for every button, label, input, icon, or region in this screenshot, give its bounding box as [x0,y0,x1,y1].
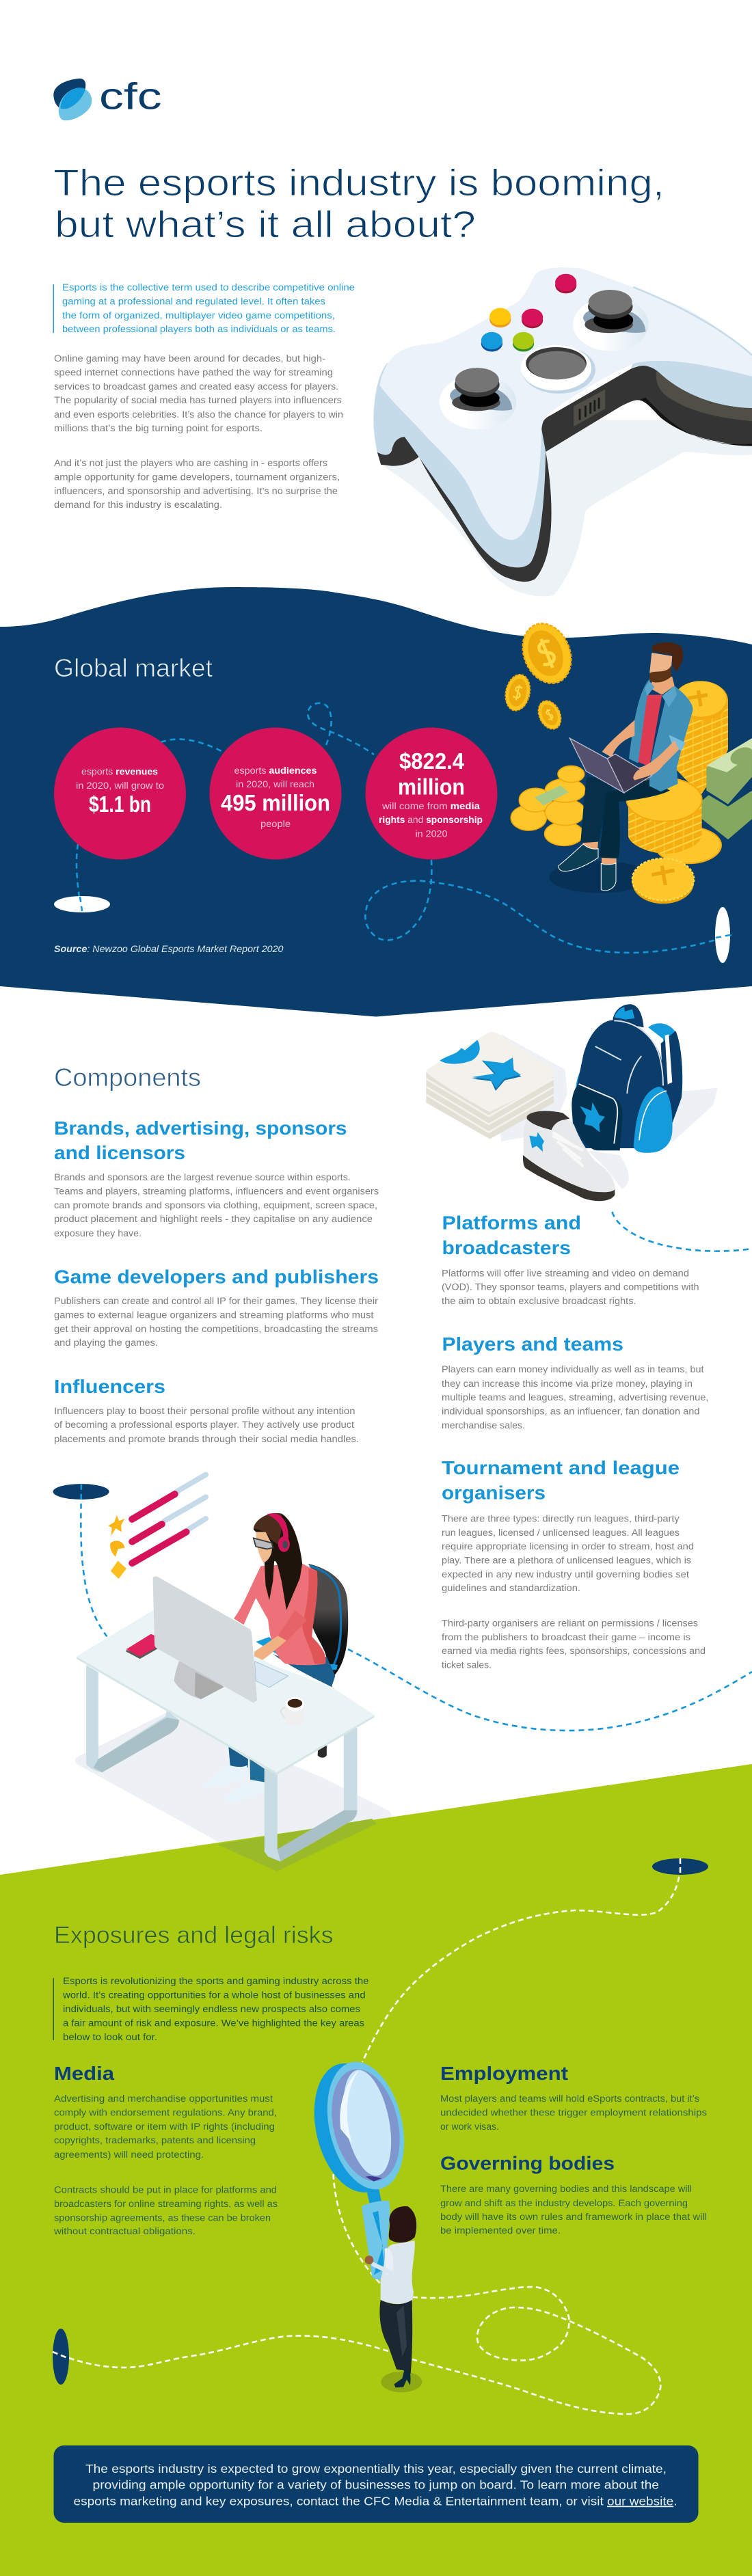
text block: tournament: expected in any new industry until governing bodies set [442,1569,689,1580]
intro callout: gaming at a professional and regulated level. It often takes [62,295,325,306]
intro body text: millions that’s the big turning point for esports. [54,423,263,433]
text block: brands: and licensors [54,1142,185,1163]
dashed path: exposures top [362,1859,680,2062]
text block: employment: undecided whether these trigger employment relationships [440,2108,707,2117]
text block: platforms: Platforms and [442,1212,581,1234]
text block: tournament [442,1457,706,1670]
intro body text: and even esports celebrities. It’s also the chance for players to win [54,409,343,420]
dashed path: chair to right edge [348,1649,752,1731]
text block: influencers: of becoming a professional esports player. They actively use product [54,1420,354,1430]
chart icon: progress bars [108,1474,206,1579]
intro body text: The popularity of social media has turned players into influencers [54,395,342,405]
text block: brands: can promote brands and sponsors via clothing, equipment, screen space, [54,1200,377,1210]
closing callout: providing ample opportunity for a variety of businesses to jump on board. To learn more about the [93,2478,659,2492]
closing callout: The esports industry is expected to grow exponentially this year, especially given the current climate, [85,2462,667,2476]
text block: media: product, software or item with IP rights (including [54,2121,275,2132]
text block: governing bodies: body will have its own rules and framework in place that will [440,2212,707,2222]
text block: influencers: Influencers [54,1376,165,1397]
intro body text: demand for this industry is escalating. [54,500,222,510]
dashed path: market connectors [77,703,731,953]
text block: platforms: the aim to obtain exclusive broadcast rights. [442,1296,636,1306]
heading: components: Components [54,1063,201,1092]
text block: platforms: (VOD). They sponsor teams, players and competitions with [442,1282,699,1292]
text block: employment: Employment [440,2063,568,2084]
heading: exposures: Exposures and legal risks [54,1922,334,1949]
source note: Source: Newzoo Global Esports Market Report 2020 [54,943,284,954]
text block: media: copyrights, trademarks, patents and licensing [54,2135,256,2145]
text block: governing bodies [440,2153,707,2236]
text block: tournament: run leagues, licensed / unlicensed leagues. All leagues [442,1528,680,1538]
text block: brands: product placement and highlight reels - they capitalise on any audience [54,1214,373,1224]
text block: players: they can increase this income via prize money, playing in [442,1379,693,1389]
marker: navy oval left [53,2329,69,2385]
marker: white oval right [715,907,730,963]
text block: players: merchandise sales. [442,1420,525,1431]
text block: platforms: Platforms will offer live streaming and video on demand [442,1268,689,1278]
text block: tournament: ticket sales. [442,1659,492,1670]
marker: white oval left [54,896,110,912]
text block: game developers: games to external league organizers and streaming platforms who must [54,1310,374,1320]
panel: global market background [0,587,752,1017]
text block: platforms: broadcasters [442,1237,571,1258]
intro body text [54,353,343,510]
text block: tournament: Tournament and league [442,1457,680,1478]
stat circle: media rights [365,727,498,860]
text block: tournament: guidelines and standardization. [442,1583,580,1593]
intro body text: services to broadcast games and created easy access for players. [54,381,338,392]
text block: media: agreements) will need protecting. [54,2150,204,2160]
dashed path: exposures lower [53,2174,660,2414]
exposures intro callout: world. It’s creating opportunities for a whole host of businesses and [62,1990,366,2001]
text block: players: Players and teams [442,1333,623,1355]
text block: influencers [54,1376,359,1444]
intro body text: influencers, and sponsorship and advertising. It’s no surprise the [54,486,338,496]
title: but what’s it all about? [55,203,476,245]
stat circle: audiences [209,727,342,860]
text block: influencers: placements and promote brands through their social media handles. [54,1434,359,1444]
dashed path: shoe to right edge [613,1212,752,1251]
illustration: merchandise backpack shirt shoe [426,1004,718,1201]
text block: game developers: get their approval on hosting the competitions, broadcasting the streams [54,1324,378,1334]
stat circle: media rights: $822.4 [399,748,465,774]
text block: tournament: require appropriate licensing in order to stream, host and [442,1541,694,1551]
title [53,161,664,245]
text block: tournament: Third-party organisers are reliant on permissions / licenses [442,1618,698,1628]
icon: navy oval marker [53,1484,109,1636]
stat circle: media rights: million [398,774,465,800]
text block: employment: Most players and teams will hold eSports contracts, but it’s [440,2093,699,2104]
text block: employment: or work visas. [440,2121,499,2132]
heading: global market: Global market [54,654,213,682]
illustration: woman at desk [53,1474,377,1871]
text block: governing bodies: grow and shift as the industry develops. Each governing [440,2198,688,2208]
text block: media: broadcasters for online streaming rights, as well as [54,2199,278,2209]
exposures intro callout: Esports is revolutionizing the sports and gaming industry across the [63,1976,369,1986]
intro callout: between professional players both as individuals or as teams. [62,323,336,334]
text block: governing bodies: Governing bodies [440,2153,615,2173]
text block: employment [440,2063,707,2132]
exposures intro callout: individuals, but with seemingly endless new prospects also comes [63,2004,360,2014]
text block: tournament: organisers [442,1482,546,1504]
exposures intro callout: a fair amount of risk and exposure. We’ve highlighted the key areas [63,2018,364,2029]
title: The esports industry is booming, [53,161,664,204]
text block: game developers [54,1266,379,1348]
text block: brands: Brands and sponsors are the largest revenue source within esports. [54,1172,351,1182]
exposures intro callout [53,1976,369,2042]
intro body text: speed internet connections have pathed the way for streaming [54,368,333,377]
text block: media: without contractual obligations. [53,2226,196,2236]
stat circle: audiences: in 2020, will reach [236,778,314,789]
intro body text: ample opportunity for game developers, tournament organizers, [54,472,340,483]
text block: brands: Brands, advertising, sponsors [54,1117,347,1139]
stat circle: revenues: $1.1 bn [89,791,151,817]
stat circle: revenues [54,727,186,860]
text block: game developers: Publishers can create and control all IP for their games. They license their [54,1296,379,1306]
text block: players: Players can earn money individually as well as in teams, but [442,1364,704,1374]
intro body text: And it’s not just the players who are cashing in - esports offers [54,458,327,468]
text block: players: individual sponsorships, as an influencer, fan donation and [442,1407,700,1416]
intro callout: the form of organized, multiplayer video game competitions, [62,310,335,321]
intro callout: Esports is the collective term used to describe competitive online [62,282,355,293]
text block: influencers: Influencers play to boost their personal profile without any intention [54,1406,355,1416]
text block: brands [54,1117,379,1238]
stat circle: revenues: in 2020, will grow to [76,780,164,791]
stat circle: audiences: 495 million [221,790,330,815]
text block: game developers: and playing the games. [54,1338,158,1348]
text block: media: Media [54,2063,114,2084]
text block: players [442,1333,708,1431]
icon: game controller [373,267,752,596]
panel: exposures background [0,1764,752,2576]
text block: media: comply with endorsement regulations. Any brand, [54,2108,277,2117]
marker: navy oval top [652,1858,708,1876]
exposures intro callout: below to look out for. [63,2032,157,2042]
logo wordmark: cfc [99,74,162,117]
logo mark [53,79,92,120]
text block: tournament: from the publishers to broadcast their game – income is [442,1632,690,1642]
stat circle: audiences: esports audiences [234,765,317,776]
text block: tournament: play. There are a plethora of unlicensed leagues, which is [442,1556,691,1566]
text block: tournament: There are three types: directly run leagues, third-party [442,1514,680,1524]
stat circle: media rights: rights and sponsorship [379,814,483,825]
text block: tournament: earned via media rights fees, sponsorships, concessions and [442,1646,706,1656]
stat circle: revenues: esports revenues [81,765,158,776]
text block: media: Advertising and merchandise opportunities must [54,2093,273,2104]
text block: brands: exposure they have. [54,1228,142,1238]
intro callout [53,282,355,334]
text block: governing bodies: be implemented over time. [440,2225,561,2236]
illustration: man on coins with laptop [502,616,752,904]
text block: governing bodies: There are many governing bodies and this landscape will [440,2184,692,2194]
stat circle: media rights: will come from media [381,800,480,811]
text block: game developers: Game developers and publishers [54,1266,379,1288]
intro body text: Online gaming may have been around for decades, but high- [54,353,325,364]
floor shadow: desk [75,1712,392,1874]
stat circle: media rights: in 2020 [416,828,448,839]
text block: media [53,2063,278,2236]
text block: media: sponsorship agreements, as these can be broken [54,2213,271,2223]
stat circle: audiences: people [260,818,291,829]
text block: brands: Teams and players, streaming platforms, influencers and event organisers [54,1187,379,1196]
closing callout: esports marketing and key exposures, contact the CFC Media & Entertainment team, or visit our website . [74,2495,677,2508]
text block: media: Contracts should be put in place for platforms and [54,2185,277,2195]
closing callout [53,2445,699,2523]
text block: players: multiple teams and leagues, streaming, advertising revenue, [442,1392,708,1402]
text block: platforms [442,1212,699,1306]
illustration: woman with magnifying glass [302,2054,422,2392]
logo [53,74,162,120]
